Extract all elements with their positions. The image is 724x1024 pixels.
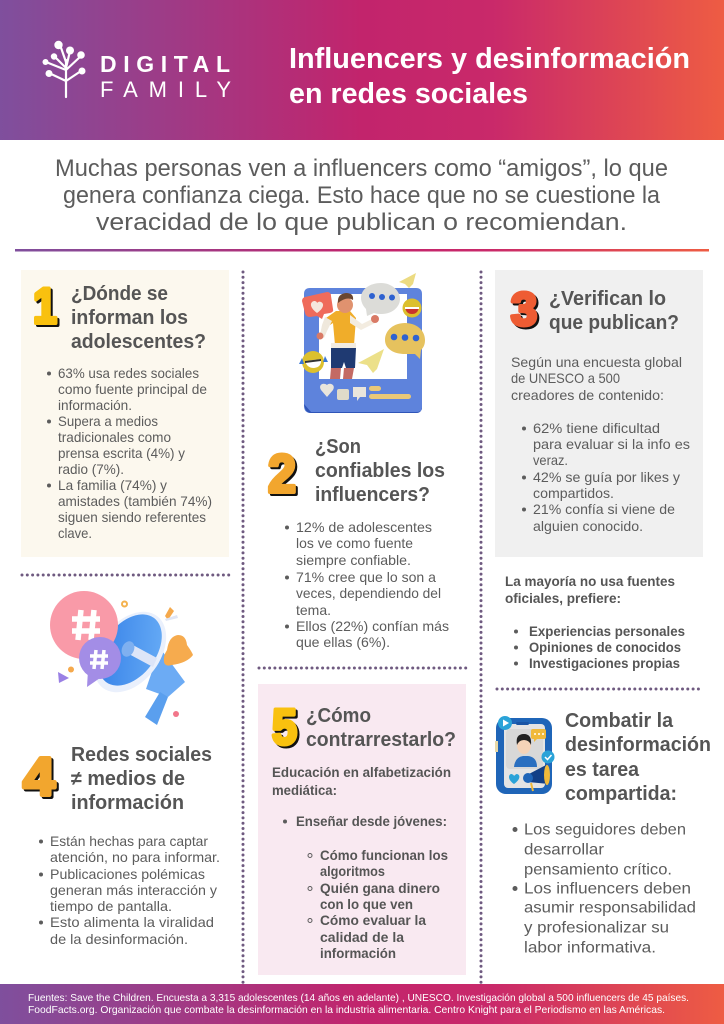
list: combatir: asumir responsabilidad bbox=[524, 900, 696, 916]
list 4: atención, no para informar. bbox=[50, 850, 220, 865]
list 2: 71% cree que lo son a bbox=[296, 570, 436, 585]
number 5: 5 bbox=[274, 701, 299, 757]
footer: sources: FoodFacts.org. Organización que combate la desinformación en la industria alimentaria. Centro Knight para el Periodismo en las Américas. bbox=[28, 1004, 665, 1016]
number 2: 2 bbox=[270, 446, 298, 506]
heading 4: ≠ medios de bbox=[71, 768, 185, 790]
heading: combatir bbox=[565, 710, 711, 805]
heading 4 bbox=[71, 744, 212, 814]
logo: Digital Family: DIGITAL bbox=[100, 51, 230, 77]
list 2: Ellos (22%) confían más bbox=[296, 619, 449, 634]
illustration: influencer frame bbox=[299, 273, 425, 413]
fuentes preferidas: Experiencias personales bbox=[529, 624, 685, 639]
list 2: los ve como fuente bbox=[296, 536, 413, 551]
number 3: 3 bbox=[511, 283, 537, 335]
list 5: calidad de la bbox=[320, 930, 404, 945]
list 2: veces, dependiendo del bbox=[296, 586, 441, 601]
list 1: amistades (también 74%) bbox=[58, 494, 212, 509]
heading: combatir: compartida: bbox=[565, 783, 677, 805]
list 5: con lo que ven bbox=[320, 897, 413, 912]
fuentes preferidas: Investigaciones propias bbox=[529, 656, 680, 671]
panel 5: como contrarrestarlo bbox=[258, 684, 466, 975]
heading: combatir: desinformación bbox=[565, 734, 711, 756]
list: combatir: Los seguidores deben bbox=[524, 822, 686, 838]
panel 1: donde se informan bbox=[21, 270, 229, 557]
fuentes preferidas: La mayoría no usa fuentes bbox=[505, 574, 675, 589]
number 1: 1 bbox=[35, 280, 59, 336]
list 3: para evaluar si la info es bbox=[533, 437, 690, 452]
heading 5: contrarrestarlo? bbox=[306, 729, 456, 751]
list 3 bbox=[522, 421, 690, 534]
intro 3 bbox=[511, 355, 682, 403]
heading 4: Redes sociales bbox=[71, 744, 212, 766]
heading 2: ¿Son bbox=[315, 436, 361, 458]
panel 3: verifican bbox=[495, 270, 703, 557]
list: combatir: Los influencers deben bbox=[524, 880, 691, 898]
fuentes preferidas bbox=[505, 574, 685, 671]
heading 4: información bbox=[71, 792, 184, 814]
subheading 5 bbox=[272, 765, 451, 798]
list 5: información bbox=[320, 946, 396, 961]
fuentes preferidas: oficiales, prefiere: bbox=[505, 591, 621, 606]
list 4: Publicaciones polémicas bbox=[50, 867, 205, 882]
list 2: que ellas (6%). bbox=[296, 635, 390, 650]
list 4: Esto alimenta la viralidad bbox=[50, 915, 214, 930]
title bbox=[289, 43, 690, 110]
intro text bbox=[55, 155, 668, 236]
number 2: 2 bbox=[268, 444, 296, 504]
heading: combatir: Combatir la bbox=[565, 710, 674, 732]
list 3: 42% se guía por likes y bbox=[533, 470, 680, 485]
list 1: 63% usa redes sociales bbox=[58, 366, 199, 381]
illustration: megaphone bbox=[50, 591, 193, 725]
heading 2: influencers? bbox=[315, 484, 430, 506]
subheading 5: Educación en alfabetización bbox=[272, 765, 451, 780]
list 3: alguien conocido. bbox=[533, 519, 643, 534]
title: Influencers y desinformación bbox=[289, 43, 690, 75]
list 4: generan más interacción y bbox=[50, 883, 217, 898]
list 2: 12% de adolescentes bbox=[296, 520, 432, 535]
list 1: tradicionales como bbox=[58, 430, 171, 445]
list 1: información. bbox=[58, 398, 132, 413]
list 1 bbox=[47, 366, 212, 541]
heading 1 bbox=[71, 283, 206, 353]
list 4: de la desinformación. bbox=[50, 932, 188, 947]
section 2 bbox=[268, 436, 449, 650]
heading 1: ¿Dónde se bbox=[71, 283, 168, 305]
list 1: clave. bbox=[58, 526, 92, 541]
list 3: veraz. bbox=[533, 453, 568, 468]
header band bbox=[0, 0, 724, 140]
logo: Digital Family: FAMILY bbox=[100, 77, 231, 102]
heading 3: ¿Verifican lo bbox=[549, 288, 666, 310]
list 4: tiempo de pantalla. bbox=[50, 899, 172, 914]
illustration: phone profile bbox=[495, 716, 554, 794]
heading 3: que publican? bbox=[549, 312, 679, 334]
list 5: Cómo evaluar la bbox=[320, 913, 426, 928]
footer: sources bbox=[0, 984, 724, 1024]
number 3: 3 bbox=[513, 285, 539, 337]
list 5: Enseñar desde jóvenes: bbox=[296, 814, 447, 829]
heading 5: ¿Cómo bbox=[306, 705, 371, 727]
list 5: Quién gana dinero bbox=[320, 881, 440, 896]
list: combatir: pensamiento crítico. bbox=[524, 862, 672, 878]
list 1: Supera a medios bbox=[58, 414, 158, 429]
list 1: prensa escrita (4%) y bbox=[58, 446, 185, 461]
intro text: Muchas personas ven a influencers como “amigos”, lo que bbox=[55, 155, 668, 182]
list 5: algoritmos bbox=[320, 864, 385, 879]
intro text: veracidad de lo que publican o recomiendan. bbox=[96, 209, 627, 236]
logo: Digital Family bbox=[42, 41, 231, 102]
heading 5 bbox=[306, 705, 456, 751]
list 2: tema. bbox=[296, 603, 331, 618]
intro 3: creadores de contenido: bbox=[511, 388, 664, 403]
list 1: siguen siendo referentes bbox=[58, 510, 206, 525]
title: en redes sociales bbox=[289, 78, 528, 110]
list 1: radio (7%). bbox=[58, 462, 124, 477]
list 4: Están hechas para captar bbox=[50, 834, 208, 849]
list 1: como fuente principal de bbox=[58, 382, 207, 397]
heading 2 bbox=[315, 436, 445, 506]
list: combatir: desarrollar bbox=[524, 842, 604, 858]
number 1: 1 bbox=[33, 278, 57, 334]
footer: sources: Fuentes: Save the Children. Encuesta a 3,315 adolescentes (14 años en adelante) , UNESCO. Investigación global a 500 influencers de 45 países. bbox=[28, 992, 689, 1004]
list: combatir: labor informativa. bbox=[524, 940, 656, 956]
list 2 bbox=[285, 520, 449, 650]
intro text: genera confianza ciega. Esto hace que no se cuestione la bbox=[63, 182, 661, 209]
list 3: 21% confía si viene de bbox=[533, 502, 675, 517]
list 5: Cómo funcionan los bbox=[320, 848, 448, 863]
fuentes preferidas: Opiniones de conocidos bbox=[529, 640, 681, 655]
subheading 5: mediática: bbox=[272, 783, 337, 798]
number 5: 5 bbox=[272, 699, 297, 755]
number 4: 4 bbox=[25, 749, 57, 809]
list: combatir bbox=[512, 822, 696, 956]
intro 3: Según una encuesta global bbox=[511, 355, 682, 370]
list 2: siempre confiable. bbox=[296, 553, 411, 568]
heading 2: confiables los bbox=[315, 460, 445, 482]
list 4 bbox=[39, 834, 220, 947]
heading 1: adolescentes? bbox=[71, 331, 206, 353]
heading 3 bbox=[549, 288, 679, 334]
heading: combatir: es tarea bbox=[565, 759, 640, 781]
list 3: compartidos. bbox=[533, 486, 614, 501]
list: combatir: y profesionalizar su bbox=[524, 920, 669, 936]
section 4 bbox=[23, 744, 220, 947]
intro 3: de UNESCO a 500 bbox=[511, 371, 620, 386]
number 4: 4 bbox=[23, 747, 55, 807]
heading 1: informan los bbox=[71, 307, 188, 329]
list 3: 62% tiene dificultad bbox=[533, 421, 660, 436]
list 1: La familia (74%) y bbox=[58, 478, 167, 493]
list 5 bbox=[283, 814, 448, 961]
